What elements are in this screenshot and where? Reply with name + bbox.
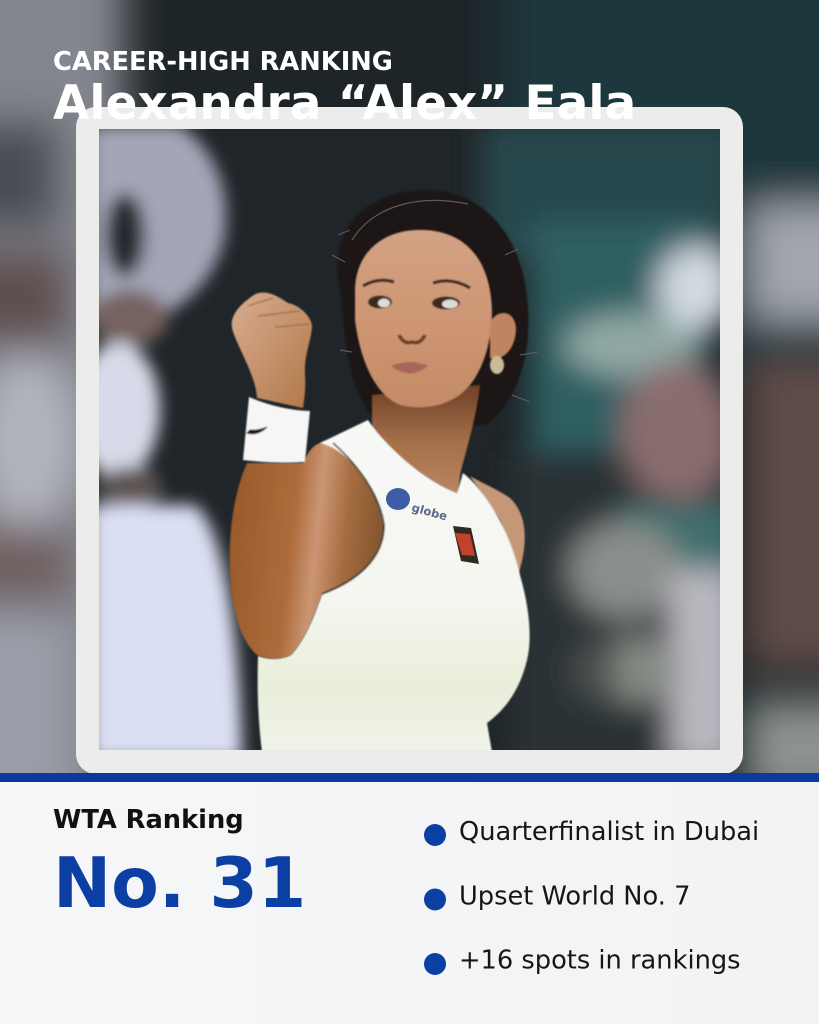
white tank top [258,420,530,752]
neck [372,385,480,494]
fist [232,293,312,408]
bullet: upset: Upset World No. 7 [459,882,690,912]
bullet: rankings: +16 spots in rankings [459,946,741,976]
photo: Alex Eala raising a fist [99,129,720,750]
blue divider bar [0,773,819,782]
blurred spectators at left [76,125,242,760]
wristband [243,397,310,463]
bottom panel [0,776,819,1024]
ranking label: WTA Ranking [53,805,244,835]
photo frame [76,107,743,774]
shirt logos: globe [410,500,449,523]
photo backdrop [99,120,740,770]
face [355,230,516,407]
title: Alexandra “Alex” Eala [53,76,636,131]
subtitle: CAREER-HIGH RANKING [53,47,393,77]
bullet: Dubai: Quarterfinalist in Dubai [459,817,759,847]
ranking value: No. 31 [53,843,306,924]
arm and shoulder [230,442,525,659]
hair [332,190,538,425]
shirt logos [386,488,479,564]
